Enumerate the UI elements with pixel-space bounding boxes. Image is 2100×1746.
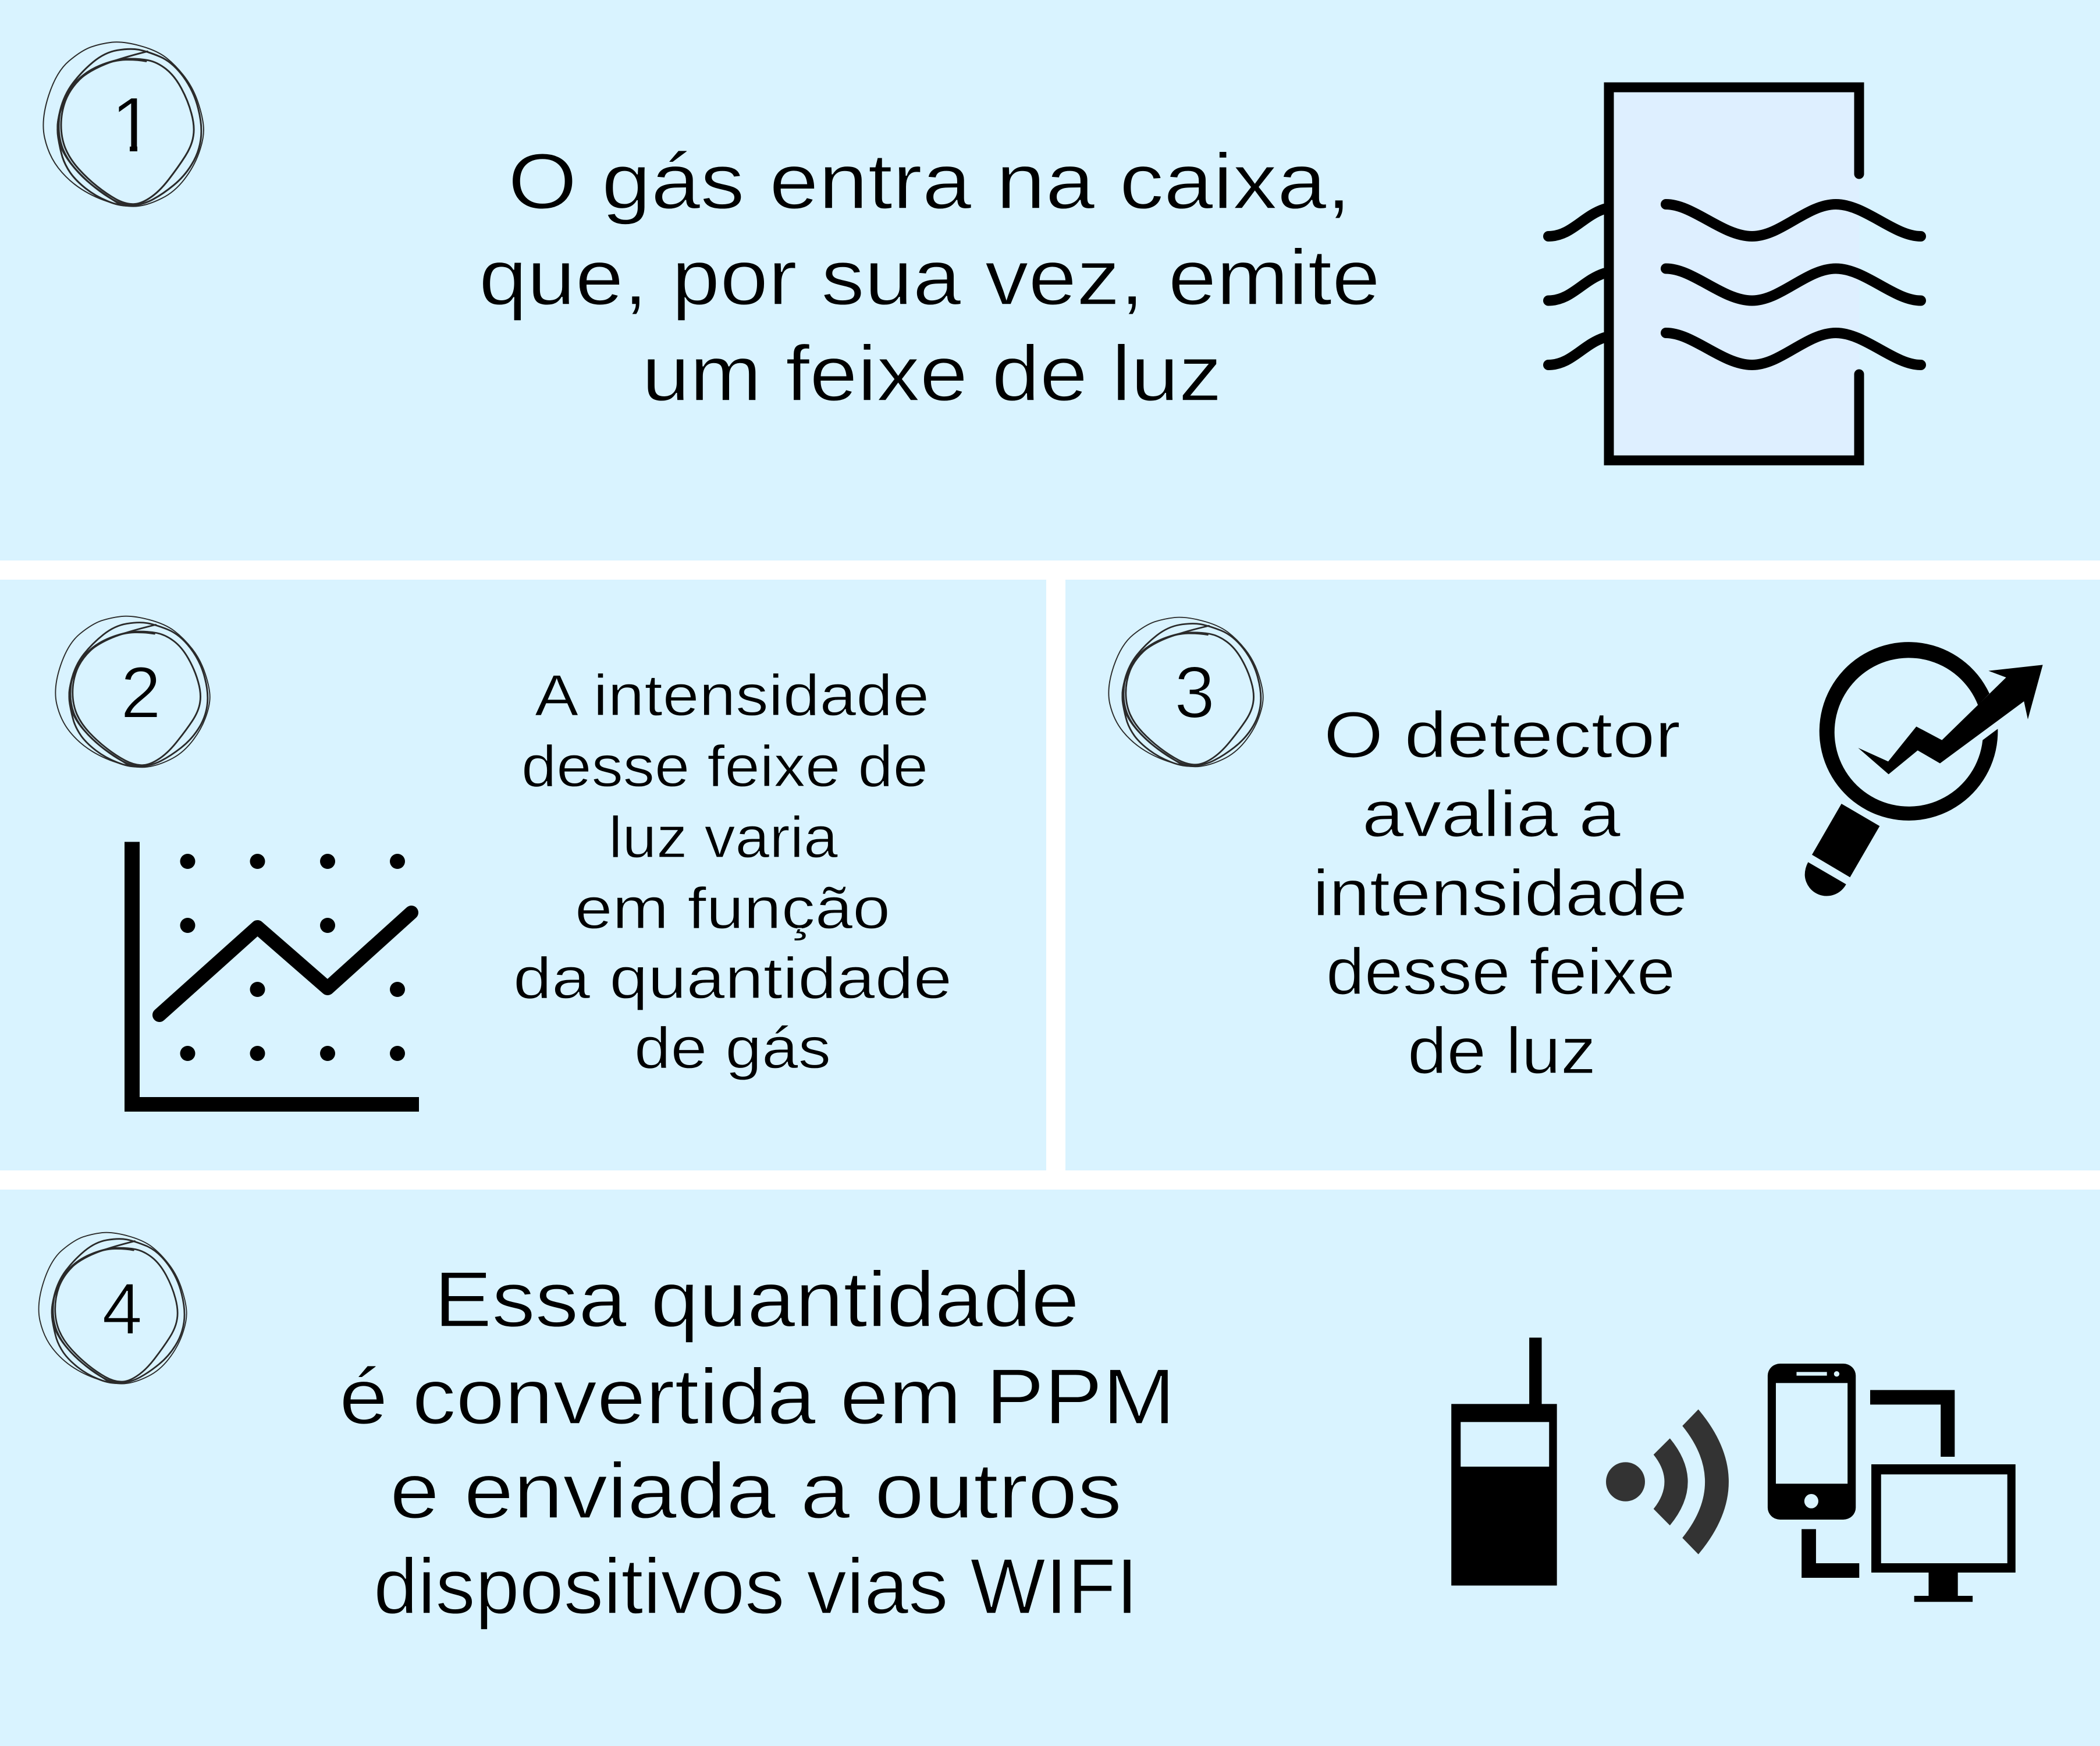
icon: magnifier with rising arrow — [1805, 642, 2043, 896]
badge: number 1: 1 — [111, 81, 155, 169]
text: step 2 description: luz varia — [609, 805, 838, 870]
text: step 3 description: avalia a — [1362, 778, 1621, 850]
text: step 2 description: da quantidade — [513, 946, 952, 1011]
text: step 2 description: desse feixe de — [521, 734, 928, 799]
badge: number 3 — [1108, 618, 1263, 766]
badge: number 4 — [39, 1233, 187, 1384]
text: step 3 description: de luz — [1408, 1014, 1596, 1087]
icon: sync brackets — [1801, 1390, 1955, 1578]
panel: step 2 — [0, 580, 1046, 1170]
icon: wifi signal — [1606, 1410, 1729, 1555]
text: step 3 description: intensidade — [1313, 857, 1687, 929]
text: step 4 description: e enviada a outros — [390, 1447, 1122, 1535]
text: step 1 description: O gás entra na caixa, — [508, 137, 1351, 225]
icon: gas box with light waves — [1548, 87, 1921, 460]
badge: number 2: 2 — [120, 652, 161, 733]
badge: number 1 — [43, 42, 204, 207]
text: step 4 description: dispositivos vias WIFI — [374, 1542, 1138, 1630]
badge: number 4: 4 — [102, 1269, 143, 1350]
icon: transmitter sending wifi to devices — [1451, 1337, 2016, 1602]
text: step 4 description: Essa quantidade — [434, 1255, 1079, 1343]
text: step 2 description — [513, 663, 952, 1081]
text: step 3 description: desse feixe — [1326, 935, 1675, 1008]
icon: radio transmitter — [1451, 1337, 1557, 1585]
icon: smartphone — [1768, 1364, 1856, 1520]
text: step 2 description: de gás — [634, 1016, 831, 1081]
text: step 1 description — [479, 137, 1380, 417]
text: step 2 description: em função — [575, 876, 890, 941]
panel: step 1 — [0, 0, 2100, 560]
text: step 4 description: é convertida em PPM — [339, 1353, 1175, 1440]
badge: number 2 — [55, 616, 210, 767]
icon: line chart with dots — [125, 842, 419, 1112]
panel: step 3 — [1065, 580, 2100, 1170]
text: step 1 description: que, por sua vez, emite — [479, 233, 1380, 321]
text: step 4 description — [339, 1255, 1175, 1630]
text: step 1 description: um feixe de luz — [642, 329, 1222, 417]
text: step 3 description — [1313, 698, 1687, 1087]
badge: number 3: 3 — [1174, 652, 1215, 733]
panel: step 4 — [0, 1190, 2100, 1746]
icon: desktop monitor — [1871, 1464, 2016, 1602]
text: step 2 description: A intensidade — [535, 663, 929, 728]
text: step 3 description: O detector — [1324, 698, 1680, 771]
